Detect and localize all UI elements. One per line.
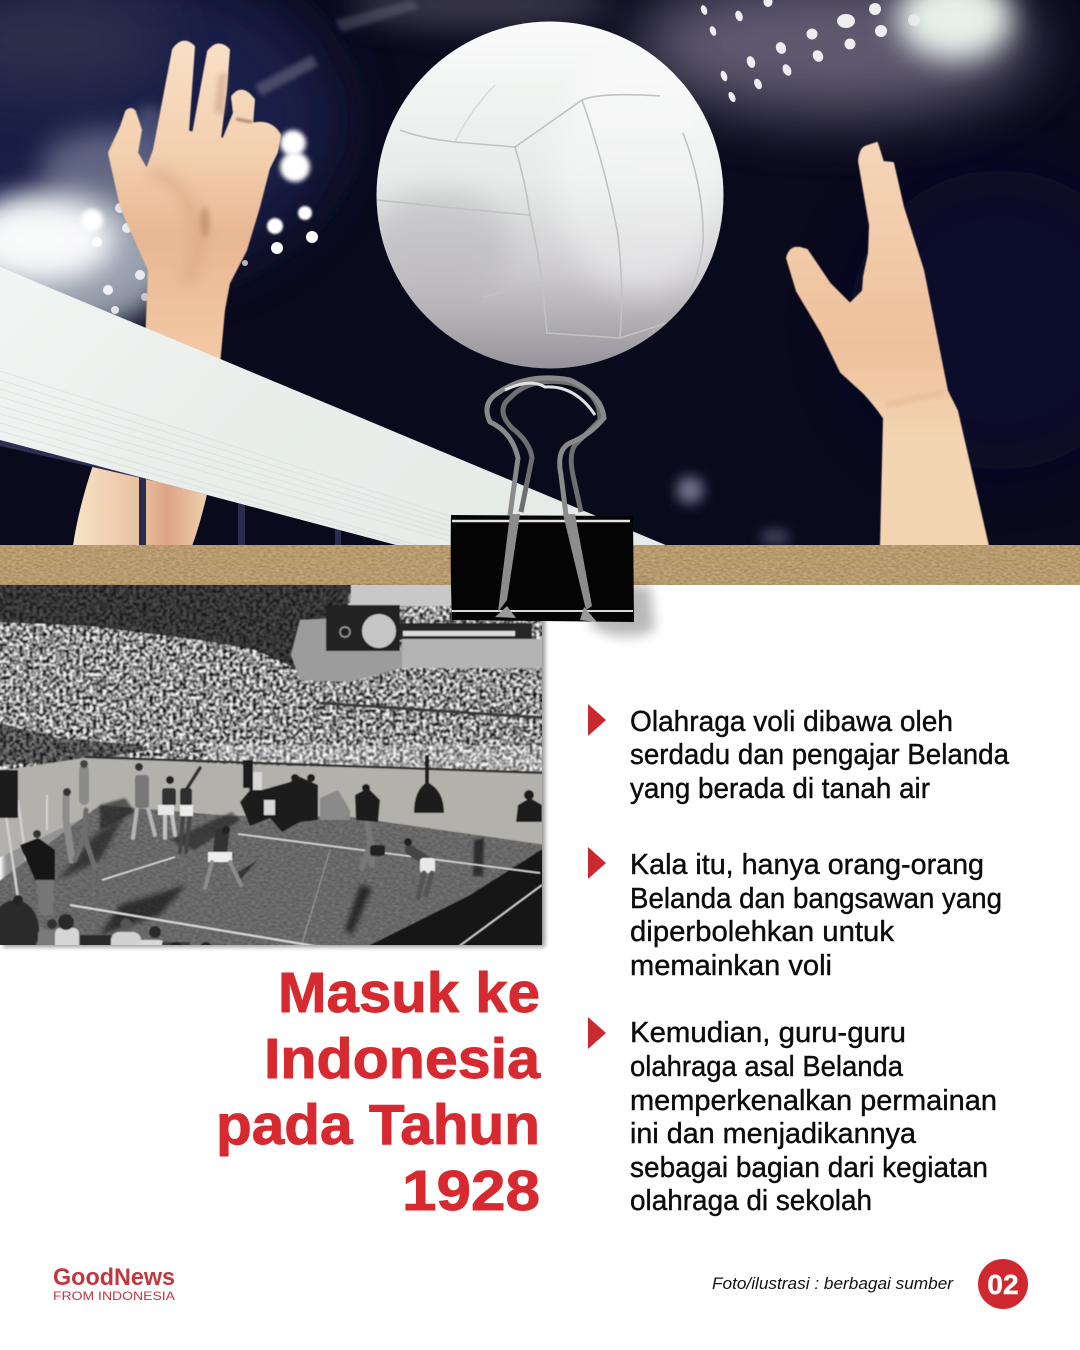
photo credit: Foto/ilustrasi : berbagai sumber (712, 1274, 954, 1293)
marker 3 (588, 1017, 606, 1049)
crowd texture (0, 585, 542, 772)
trees (0, 580, 355, 668)
umpire stand and figure (0, 770, 55, 915)
marker 1 (588, 704, 606, 736)
white page background (0, 585, 1080, 1350)
court lines (46, 794, 542, 945)
stadium lights left (81, 130, 318, 314)
right hand (787, 143, 988, 546)
upper wall and scoreboard (291, 580, 547, 682)
hero: stadium scene (0, 0, 1080, 546)
clip arm left (498, 514, 520, 612)
stadium background (0, 0, 1080, 546)
bullet point 1: yang berada di tanah air (630, 773, 930, 805)
apron (0, 757, 547, 860)
title: Indonesia (264, 1027, 541, 1091)
title: 1928 (402, 1159, 540, 1223)
bullet point 1 (588, 704, 1010, 805)
marker 2 (588, 847, 606, 879)
bullet point 2: Belanda dan bangsawan yang (630, 883, 1002, 915)
stand railing (320, 703, 547, 718)
lower arm behind net (73, 465, 208, 546)
bullet point 1: serdadu dan pengajar Belanda (630, 739, 1010, 771)
bullet point 3: Kemudian, guru-guru (630, 1017, 906, 1049)
bullet point 3 (588, 1017, 997, 1217)
bullet point 2: memainkan voli (630, 950, 832, 982)
bullet point 2 (588, 847, 1002, 982)
court shadows (58, 798, 547, 950)
photo shadow (3, 587, 545, 947)
bullet point 3: ini dan menjadikannya (630, 1118, 917, 1150)
title (216, 961, 541, 1223)
logo (53, 1264, 175, 1303)
bullet point 3: olahraga di sekolah (630, 1185, 872, 1217)
dark crowd band left (0, 722, 150, 765)
volleyball players (63, 760, 435, 898)
cardboard strip (0, 545, 1080, 585)
logo: GoodNews (53, 1264, 175, 1291)
page number badge (978, 1259, 1028, 1309)
bullet point 1: Olahraga voli dibawa oleh (630, 706, 953, 738)
volleyball (370, 22, 725, 368)
bullet point 3: sebagai bagian dari kegiatan (630, 1152, 988, 1184)
clip arm right (563, 514, 592, 610)
front spectators (0, 894, 212, 945)
bullet point 3: memperkenalkan permainan (630, 1085, 997, 1117)
white shirts along court (210, 745, 542, 772)
logo: FROM INDONESIA (53, 1291, 175, 1303)
bullet point 2: Kala itu, hanya orang-orang (630, 849, 984, 881)
title: pada Tahun (216, 1093, 540, 1157)
playing court (0, 805, 547, 950)
historic volleyball match photo (0, 580, 550, 964)
net post and weight (243, 755, 444, 813)
page number badge: 02 (987, 1269, 1019, 1300)
bullet point 3: olahraga asal Belanda (630, 1051, 904, 1083)
clip body (451, 515, 634, 622)
clip wire back (503, 381, 600, 512)
bullet list (588, 704, 1010, 1217)
stadium lights right (699, 0, 1013, 103)
bullet point 2: diperbolehkan untuk (630, 916, 895, 948)
clip shadow (590, 585, 655, 636)
binder clip (451, 378, 634, 622)
clip wire front (487, 378, 604, 515)
net poles (139, 475, 341, 546)
left hand (110, 43, 279, 365)
clip tabs (495, 606, 597, 622)
title: Masuk ke (278, 961, 540, 1025)
volleyball net band (0, 267, 668, 546)
officials on bench (240, 774, 542, 832)
